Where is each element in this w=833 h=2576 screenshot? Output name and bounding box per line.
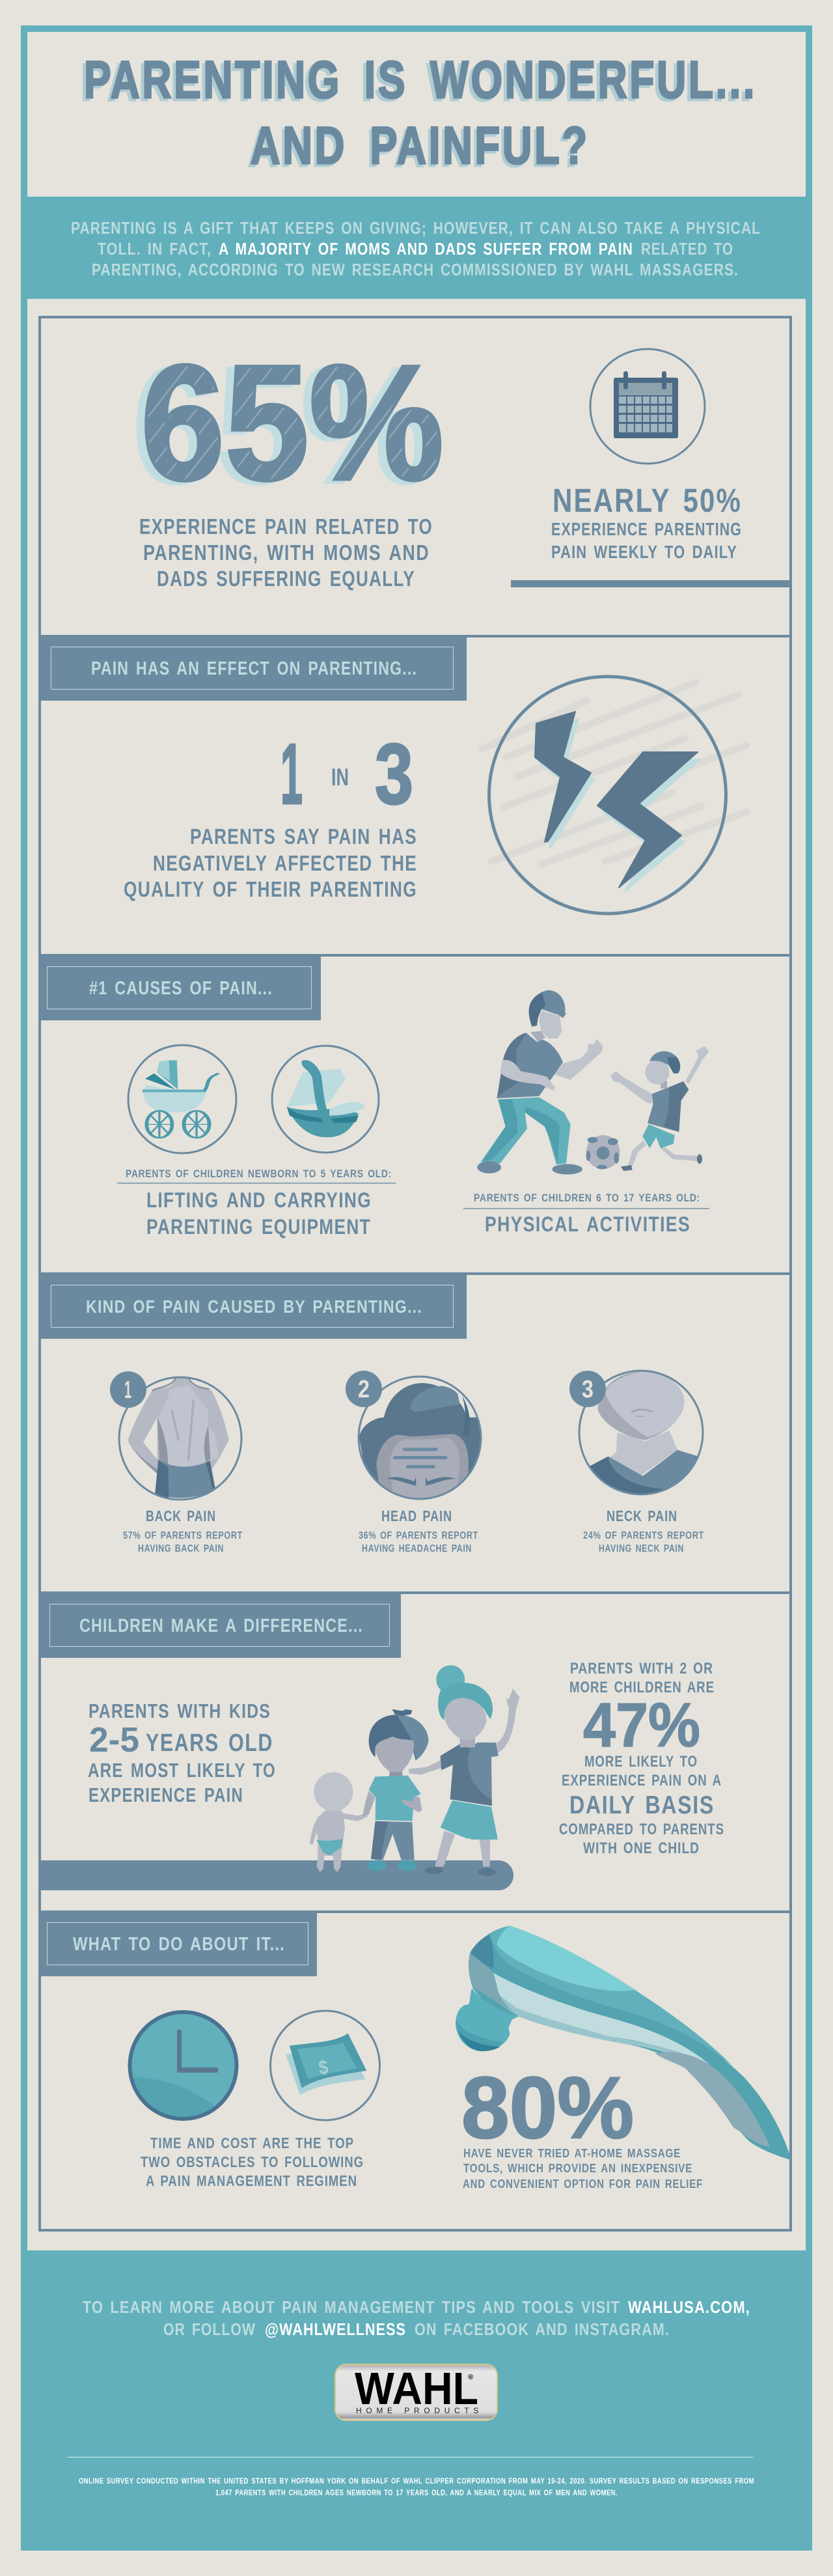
illustration: family (310, 1665, 519, 1876)
stat description: PARENTS SAY PAIN HAS (190, 824, 417, 848)
text: 47 percent stat: PARENTS WITH 2 OR (570, 1660, 713, 1677)
back pain caption: BACK PAIN (146, 1507, 216, 1524)
head pain caption: 36% OF PARENTS REPORT (359, 1530, 478, 1541)
head pain caption (359, 1507, 478, 1554)
neck pain caption: NECK PAIN (607, 1507, 677, 1524)
panel: pain effect (38, 635, 746, 914)
65 percent description (139, 514, 433, 591)
newborn to 5 caption: PARENTING EQUIPMENT (146, 1215, 371, 1239)
title: AND PAINFUL? (248, 119, 587, 178)
stat 1 in 3: IN (331, 764, 349, 791)
stat description: NEGATIVELY AFFECTED THE (153, 851, 417, 875)
panel: causes of pain (38, 954, 709, 1239)
accent bar (511, 580, 790, 587)
footer call to action: TO LEARN MORE ABOUT PAIN MANAGEMENT TIPS AND TOOLS VISIT (83, 2297, 620, 2317)
icon: car seat (272, 1046, 379, 1153)
text: 47 percent stat: COMPARED TO PARENTS (559, 1821, 724, 1838)
panel: what to do about it (38, 1911, 791, 2191)
icon: calendar (590, 349, 705, 464)
65 percent description: PARENTING, WITH MOMS AND (143, 540, 430, 565)
heading: PAIN HAS AN EFFECT ON PARENTING... (91, 658, 417, 679)
text: kids 2-5 years old (88, 1700, 276, 1806)
back pain caption (123, 1507, 243, 1554)
obstacles text: TWO OBSTACLES TO FOLLOWING (141, 2153, 364, 2170)
heading: KIND OF PAIN CAUSED BY PARENTING... (86, 1296, 422, 1317)
title: AND PAINFUL? (251, 117, 590, 175)
illustration: father and son playing soccer (477, 990, 709, 1175)
back pain caption: HAVING BACK PAIN (138, 1543, 224, 1554)
icon: neck pain (569, 1371, 703, 1495)
icon: head pain: 2 (358, 1376, 370, 1403)
nearly 50 percent stat: PAIN WEEKLY TO DAILY (551, 542, 737, 562)
wahl logo: WAHL (355, 2363, 478, 2414)
title (81, 51, 757, 178)
text: 47 percent stat: MORE CHILDREN ARE (569, 1679, 715, 1696)
newborn to 5 caption (117, 1168, 396, 1239)
survey footnote (79, 2476, 754, 2497)
icon: back pain: 1 (124, 1377, 131, 1404)
intro text block (71, 218, 761, 279)
footer call to action: OR FOLLOW (163, 2319, 256, 2339)
obstacles text: TIME AND COST ARE THE TOP (150, 2135, 354, 2151)
text: kids 2-5 years old: ARE MOST LIKELY TO (88, 1759, 276, 1782)
panel: children make a difference (38, 1591, 724, 1890)
newborn to 5 caption: LIFTING AND CARRYING (146, 1188, 372, 1212)
text: kids 2-5 years old: YEARS OLD (146, 1729, 273, 1757)
big stat 80%: 80% (461, 2060, 634, 2157)
icon: money (271, 2011, 380, 2120)
text: kids 2-5 years old: PARENTS WITH KIDS (89, 1700, 271, 1722)
neck pain caption: HAVING NECK PAIN (599, 1543, 684, 1554)
footer call to action (83, 2297, 750, 2339)
inner slate frame with section dividers (38, 316, 792, 2232)
nearly 50 percent stat (551, 482, 742, 562)
stat description (124, 824, 417, 901)
stat description: QUALITY OF THEIR PARENTING (124, 877, 417, 901)
icon: money: $ (317, 2056, 330, 2079)
65 percent description: EXPERIENCE PAIN RELATED TO (139, 514, 433, 539)
intro text block: A MAJORITY OF MOMS AND DADS SUFFER FROM PAIN (219, 239, 633, 259)
neck pain caption (583, 1507, 704, 1554)
icon: neck pain: 3 (582, 1376, 594, 1403)
big stat 65%: 65% (133, 334, 436, 517)
intro text block: RELATED TO (641, 239, 733, 259)
icon: lightning bolts in circle (482, 677, 746, 914)
head pain caption: HEAD PAIN (381, 1507, 452, 1524)
text: 47 percent stat: EXPERIENCE PAIN ON A (562, 1772, 722, 1789)
back pain caption: 57% OF PARENTS REPORT (123, 1530, 243, 1541)
massage text: TOOLS, WHICH PROVIDE AN INEXPENSIVE (463, 2162, 692, 2175)
panel: kind of pain (38, 1272, 704, 1554)
text: 47 percent stat: 47% (583, 1690, 700, 1760)
heading (38, 1911, 317, 1976)
icon: clock (128, 2010, 238, 2121)
intro text block: TOLL. IN FACT, (98, 239, 212, 259)
stat 1 in 3 (280, 726, 413, 822)
text: 47 percent stat: MORE LIKELY TO (584, 1753, 698, 1771)
obstacles text: A PAIN MANAGEMENT REGIMEN (146, 2172, 357, 2189)
wahl logo: ® (468, 2373, 473, 2381)
stat 1 in 3: 3 (375, 726, 413, 822)
footer call to action: @WAHLWELLNESS (265, 2319, 406, 2339)
heading: CHILDREN MAKE A DIFFERENCE... (79, 1616, 363, 1636)
stat 1 in 3: 1 (280, 726, 303, 822)
icon: stroller (128, 1045, 236, 1153)
wahl logo: HOME PRODUCTS (356, 2406, 479, 2415)
heading (38, 1272, 467, 1339)
heading (38, 1591, 401, 1658)
massage text: AND CONVENIENT OPTION FOR PAIN RELIEF (463, 2177, 703, 2191)
illustration: massager (456, 1925, 791, 2160)
6 to 17 caption: PHYSICAL ACTIVITIES (485, 1212, 690, 1236)
head pain caption: HAVING HEADACHE PAIN (362, 1543, 472, 1554)
obstacles text (141, 2135, 364, 2189)
heading: WHAT TO DO ABOUT IT... (73, 1934, 285, 1955)
footer call to action: WAHLUSA.COM, (628, 2297, 750, 2317)
6 to 17 caption (463, 1192, 709, 1236)
text: 47 percent stat: DAILY BASIS (569, 1791, 715, 1819)
floor bar (41, 1860, 513, 1890)
icon: head pain (346, 1371, 484, 1506)
heading (38, 954, 321, 1020)
text: 47 percent stat: WITH ONE CHILD (583, 1840, 700, 1857)
text: kids 2-5 years old: 2-5 (89, 1720, 139, 1759)
65 percent description: DADS SUFFERING EQUALLY (157, 567, 415, 591)
footer call to action: ON FACEBOOK AND INSTAGRAM. (415, 2319, 670, 2339)
heading (38, 635, 467, 701)
big stat 65%: 65% (141, 331, 444, 514)
heading: #1 CAUSES OF PAIN... (89, 978, 273, 999)
nearly 50 percent stat: EXPERIENCE PARENTING (551, 519, 742, 539)
text: 47 percent stat (559, 1660, 724, 1857)
neck pain caption: 24% OF PARENTS REPORT (583, 1530, 704, 1541)
massage text (463, 2147, 703, 2191)
newborn to 5 caption: PARENTS OF CHILDREN NEWBORN TO 5 YEARS OLD: (126, 1168, 392, 1180)
nearly 50 percent stat: NEARLY 50% (553, 482, 742, 519)
panel: 65 percent (133, 331, 790, 591)
6 to 17 caption: PARENTS OF CHILDREN 6 TO 17 YEARS OLD: (474, 1192, 700, 1204)
massage text: HAVE NEVER TRIED AT-HOME MASSAGE (463, 2147, 681, 2160)
icon: back pain (110, 1371, 241, 1500)
text: kids 2-5 years old: EXPERIENCE PAIN (89, 1784, 243, 1806)
survey footnote: 1,047 PARENTS WITH CHILDREN AGES NEWBORN TO 17 YEARS OLD, AND A NEARLY EQUAL MIX OF MEN AND WOMEN. (215, 2488, 618, 2497)
